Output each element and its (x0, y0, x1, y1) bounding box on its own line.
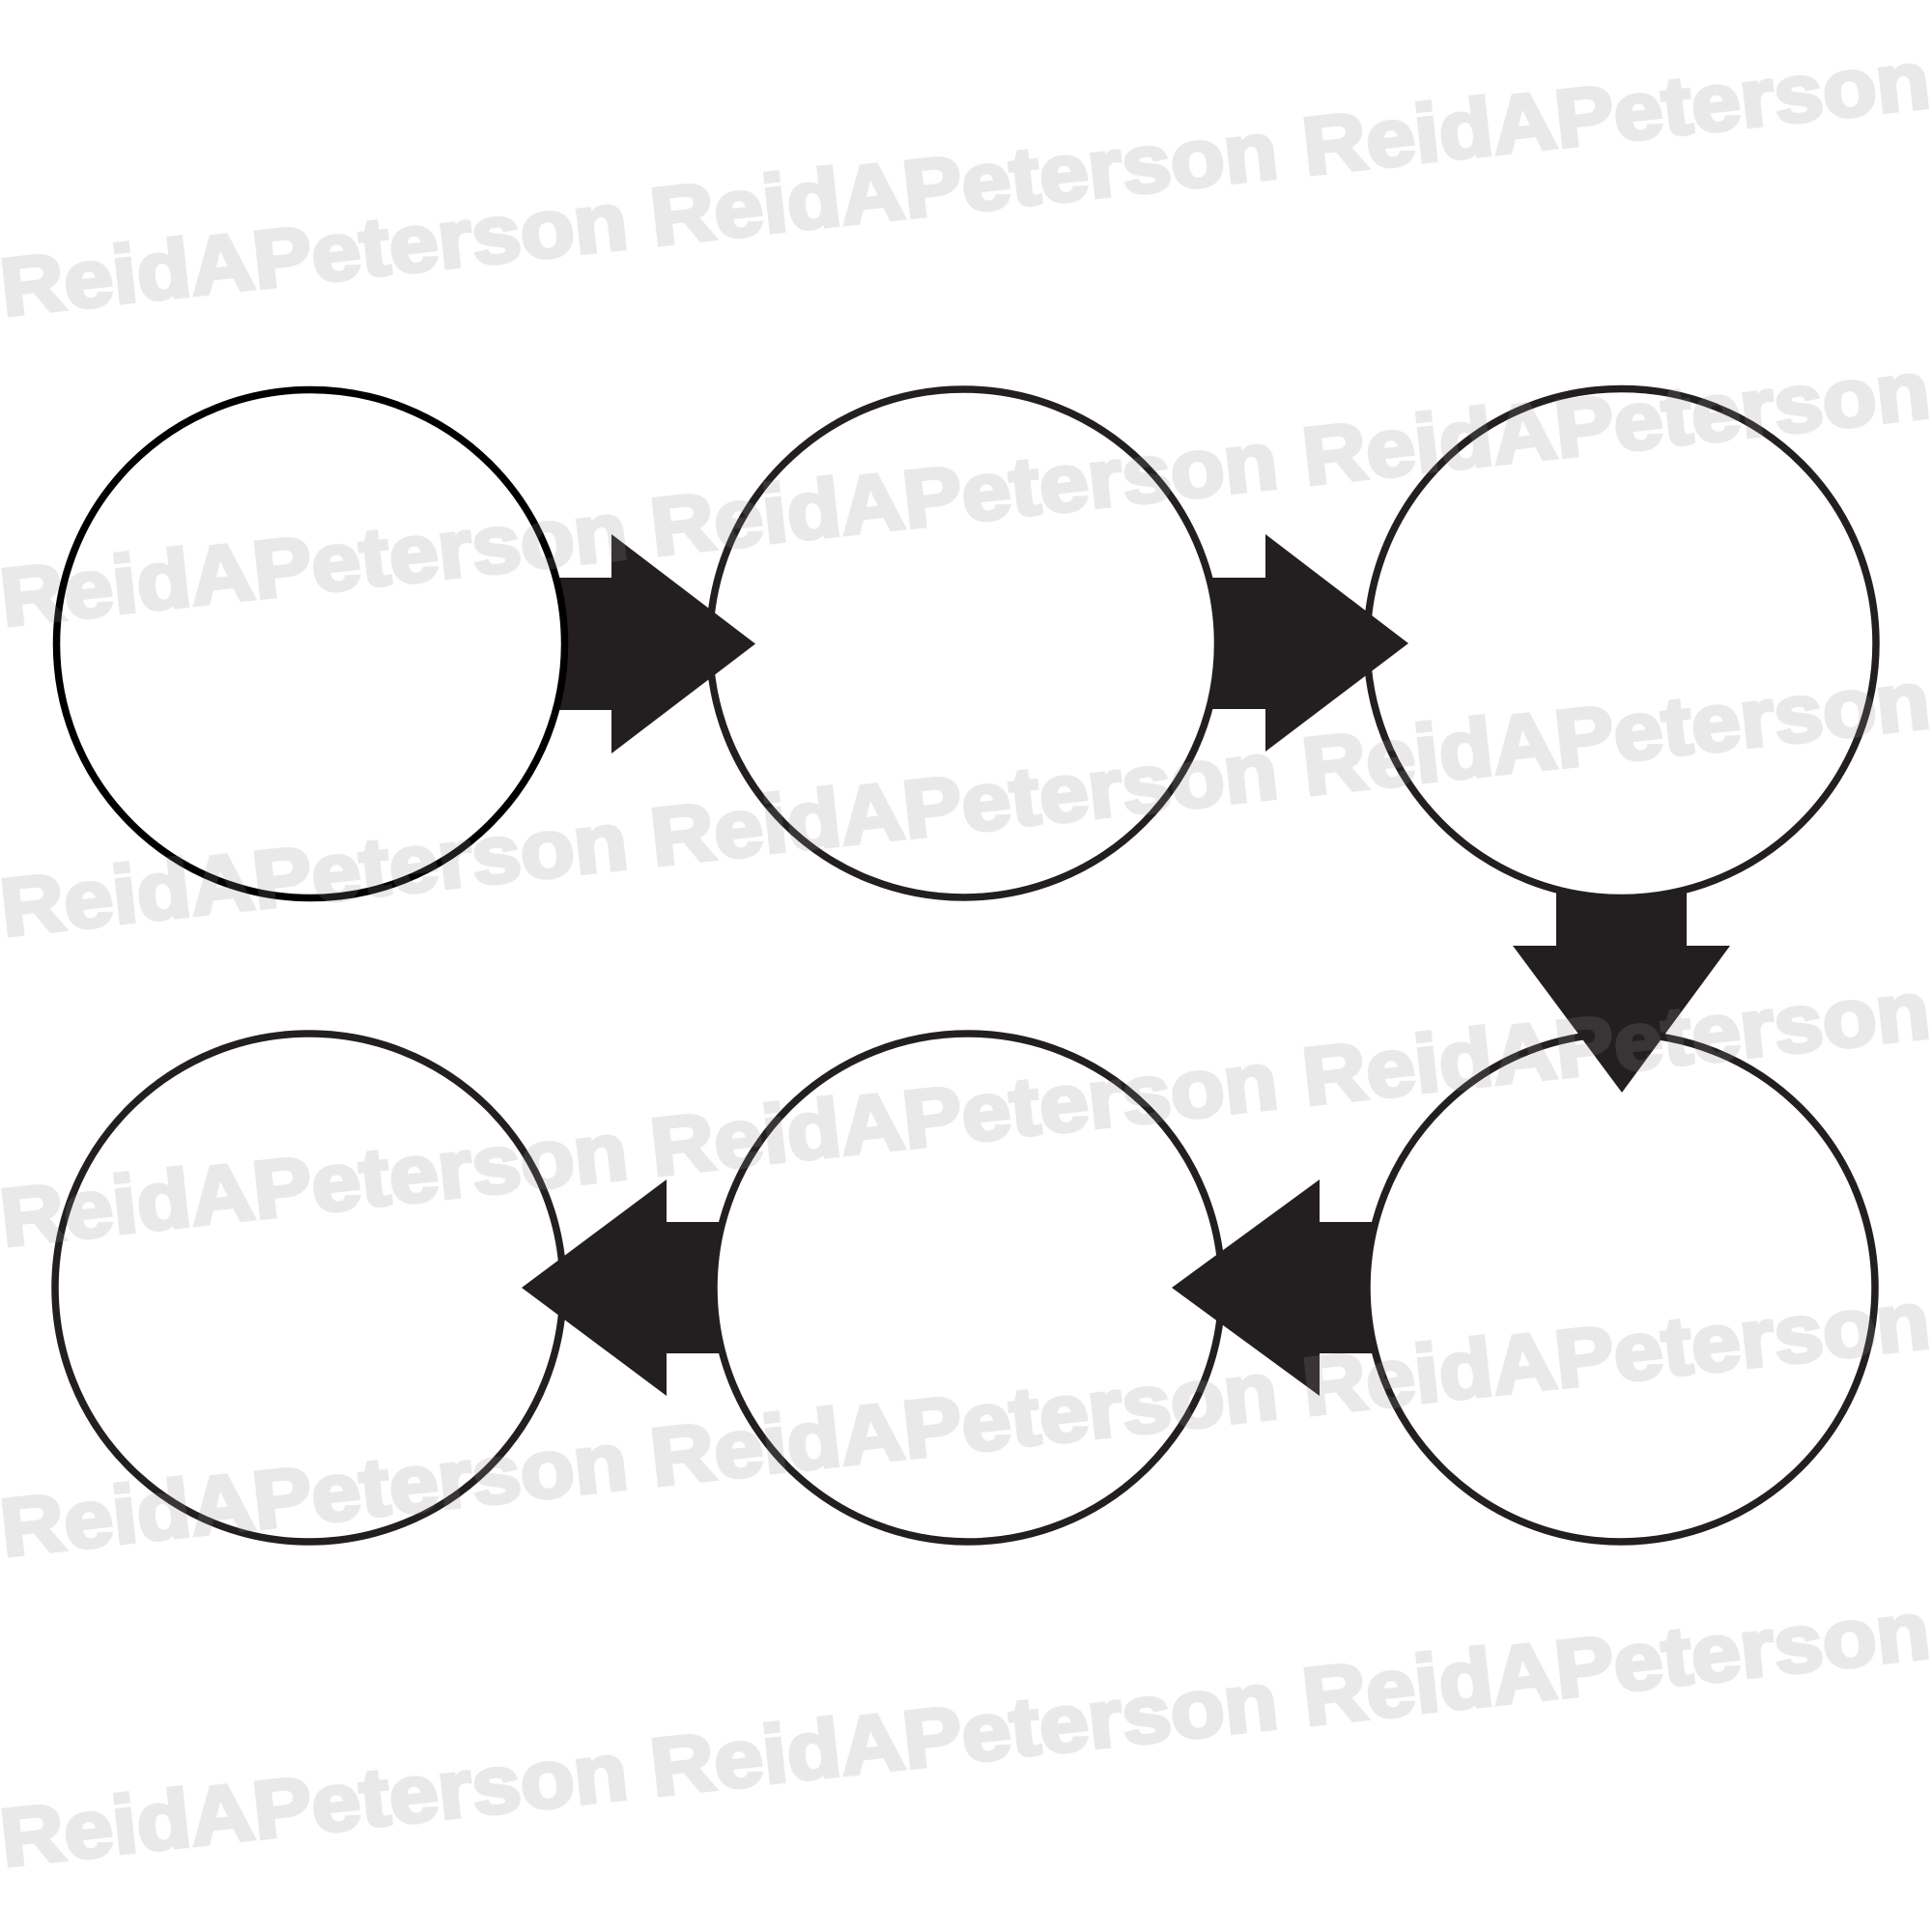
circle 2: top middle (709, 389, 1217, 897)
circle 3: top right (1367, 388, 1876, 898)
arrow: circle 5 to circle 6 (522, 1179, 721, 1396)
watermark text: ReidAPeterson (0, 1725, 632, 1884)
arrow: circle 4 to circle 5 (1172, 1179, 1377, 1396)
watermark text: ReidAPeterson (0, 1105, 632, 1264)
arrow: circle 1 to circle 2 (555, 534, 755, 753)
circle 5: bottom middle (714, 1034, 1222, 1542)
watermark text: ReidAPeterson (1298, 654, 1932, 812)
watermark text: ReidAPeterson (646, 1035, 1282, 1193)
arrow: circle 2 to circle 3 (1208, 534, 1408, 752)
watermark text: ReidAPeterson (1298, 34, 1932, 192)
circle 4: bottom right (1367, 1034, 1875, 1542)
watermark text: ReidAPeterson (0, 1415, 632, 1574)
watermark text: ReidAPeterson (646, 1655, 1282, 1813)
watermark text: ReidAPeterson (1298, 964, 1932, 1122)
watermark text: ReidAPeterson (0, 795, 632, 953)
circle 1: top left (56, 390, 564, 898)
arrow: circle 3 to circle 4 (1513, 884, 1730, 1093)
watermark text: ReidAPeterson (646, 414, 1282, 573)
circle 6: bottom left (55, 1034, 563, 1542)
watermark text: ReidAPeterson (646, 724, 1282, 883)
watermark text: ReidAPeterson (1298, 344, 1932, 502)
watermark text: ReidAPeterson (0, 485, 632, 643)
watermark text: ReidAPeterson (646, 1345, 1282, 1503)
watermark text: ReidAPeterson (646, 104, 1282, 263)
watermark text: ReidAPeterson (0, 175, 632, 333)
watermark text: ReidAPeterson (1298, 1584, 1932, 1743)
watermark text: ReidAPeterson (1298, 1274, 1932, 1433)
